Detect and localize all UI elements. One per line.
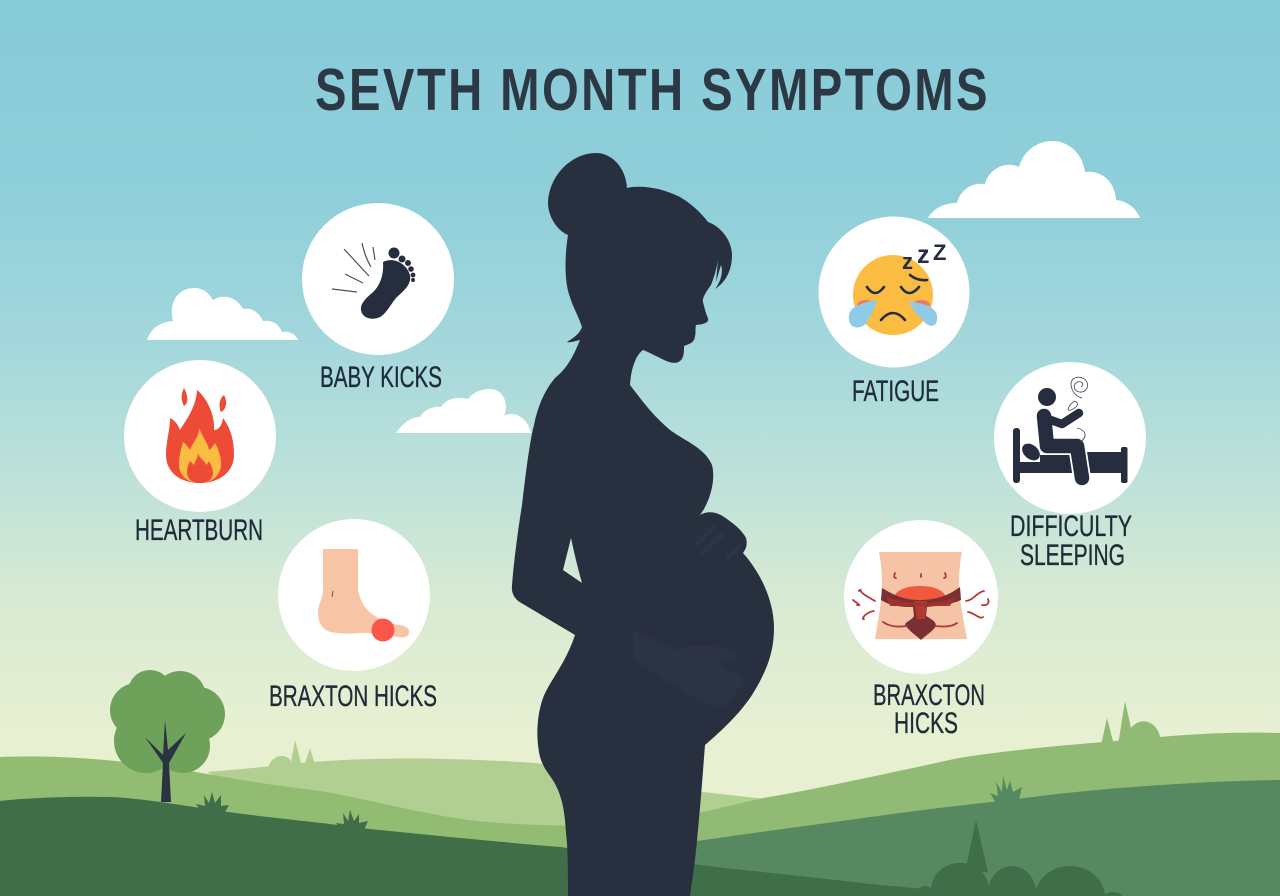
- circle: [994, 362, 1146, 514]
- circle: [818, 216, 970, 368]
- hill: green right: [690, 780, 1280, 896]
- item: difficulty sleeping: [994, 362, 1146, 572]
- title: SEVTH MONTH SYMPTOMS: [315, 57, 990, 123]
- zzz: z: [902, 249, 913, 274]
- label: HICKS: [894, 707, 958, 740]
- label: BRAXTON HICKS: [269, 680, 437, 713]
- lower hand shading: [633, 630, 747, 708]
- tree left: [110, 670, 225, 802]
- item: braxcton hicks abdomen: [844, 520, 998, 740]
- silhouette of pregnant woman: [512, 153, 774, 896]
- circle: [302, 203, 454, 355]
- zzz: z: [917, 241, 930, 269]
- upper hand fingers: [698, 527, 741, 558]
- item: braxton hicks foot: [269, 519, 437, 713]
- cloud: top right: [928, 141, 1140, 218]
- item: heartburn: [124, 360, 276, 547]
- tree trunk: [145, 720, 186, 802]
- icon: sleepy face: [849, 240, 946, 335]
- hill: dark foreground: [0, 797, 1000, 896]
- circle: [124, 360, 276, 512]
- hill: mid left: [0, 757, 580, 896]
- circle: [844, 520, 998, 674]
- tree crown: [110, 670, 225, 773]
- grass tuft right: [990, 776, 1022, 803]
- label: FATIGUE: [852, 375, 939, 408]
- icon: swollen foot: [318, 549, 409, 642]
- hill: far light: [207, 758, 765, 830]
- icon: person sitting on bed: [1013, 377, 1128, 483]
- grass tuft left 1: [196, 792, 229, 812]
- item: baby kicks: [302, 203, 454, 394]
- icon: flame: [166, 388, 234, 483]
- clouds: [147, 141, 1140, 433]
- landscape hills: [0, 701, 1280, 896]
- label: SLEEPING: [1020, 539, 1125, 572]
- icon: abdomen: [853, 552, 989, 640]
- label: DIFFICULTY: [1010, 510, 1132, 543]
- bush right foreground: [917, 820, 1123, 896]
- icon: foot: [332, 243, 415, 319]
- label: BABY KICKS: [320, 361, 442, 394]
- label: [1010, 510, 1132, 572]
- body silhouette: [512, 153, 774, 896]
- grass tuft left 2: [336, 810, 368, 830]
- label: BRAXCTON: [873, 679, 985, 712]
- cloud: left: [147, 288, 298, 340]
- zzz: [902, 240, 946, 274]
- cloud: middle: [396, 389, 531, 433]
- circle: [278, 519, 430, 671]
- distant trees left: [268, 740, 316, 768]
- label: [873, 679, 985, 740]
- item: fatigue: [818, 216, 970, 408]
- zzz: Z: [933, 240, 946, 265]
- label: HEARTBURN: [135, 514, 263, 547]
- distant trees right: [1101, 701, 1161, 745]
- hill: mid right: [690, 733, 1280, 896]
